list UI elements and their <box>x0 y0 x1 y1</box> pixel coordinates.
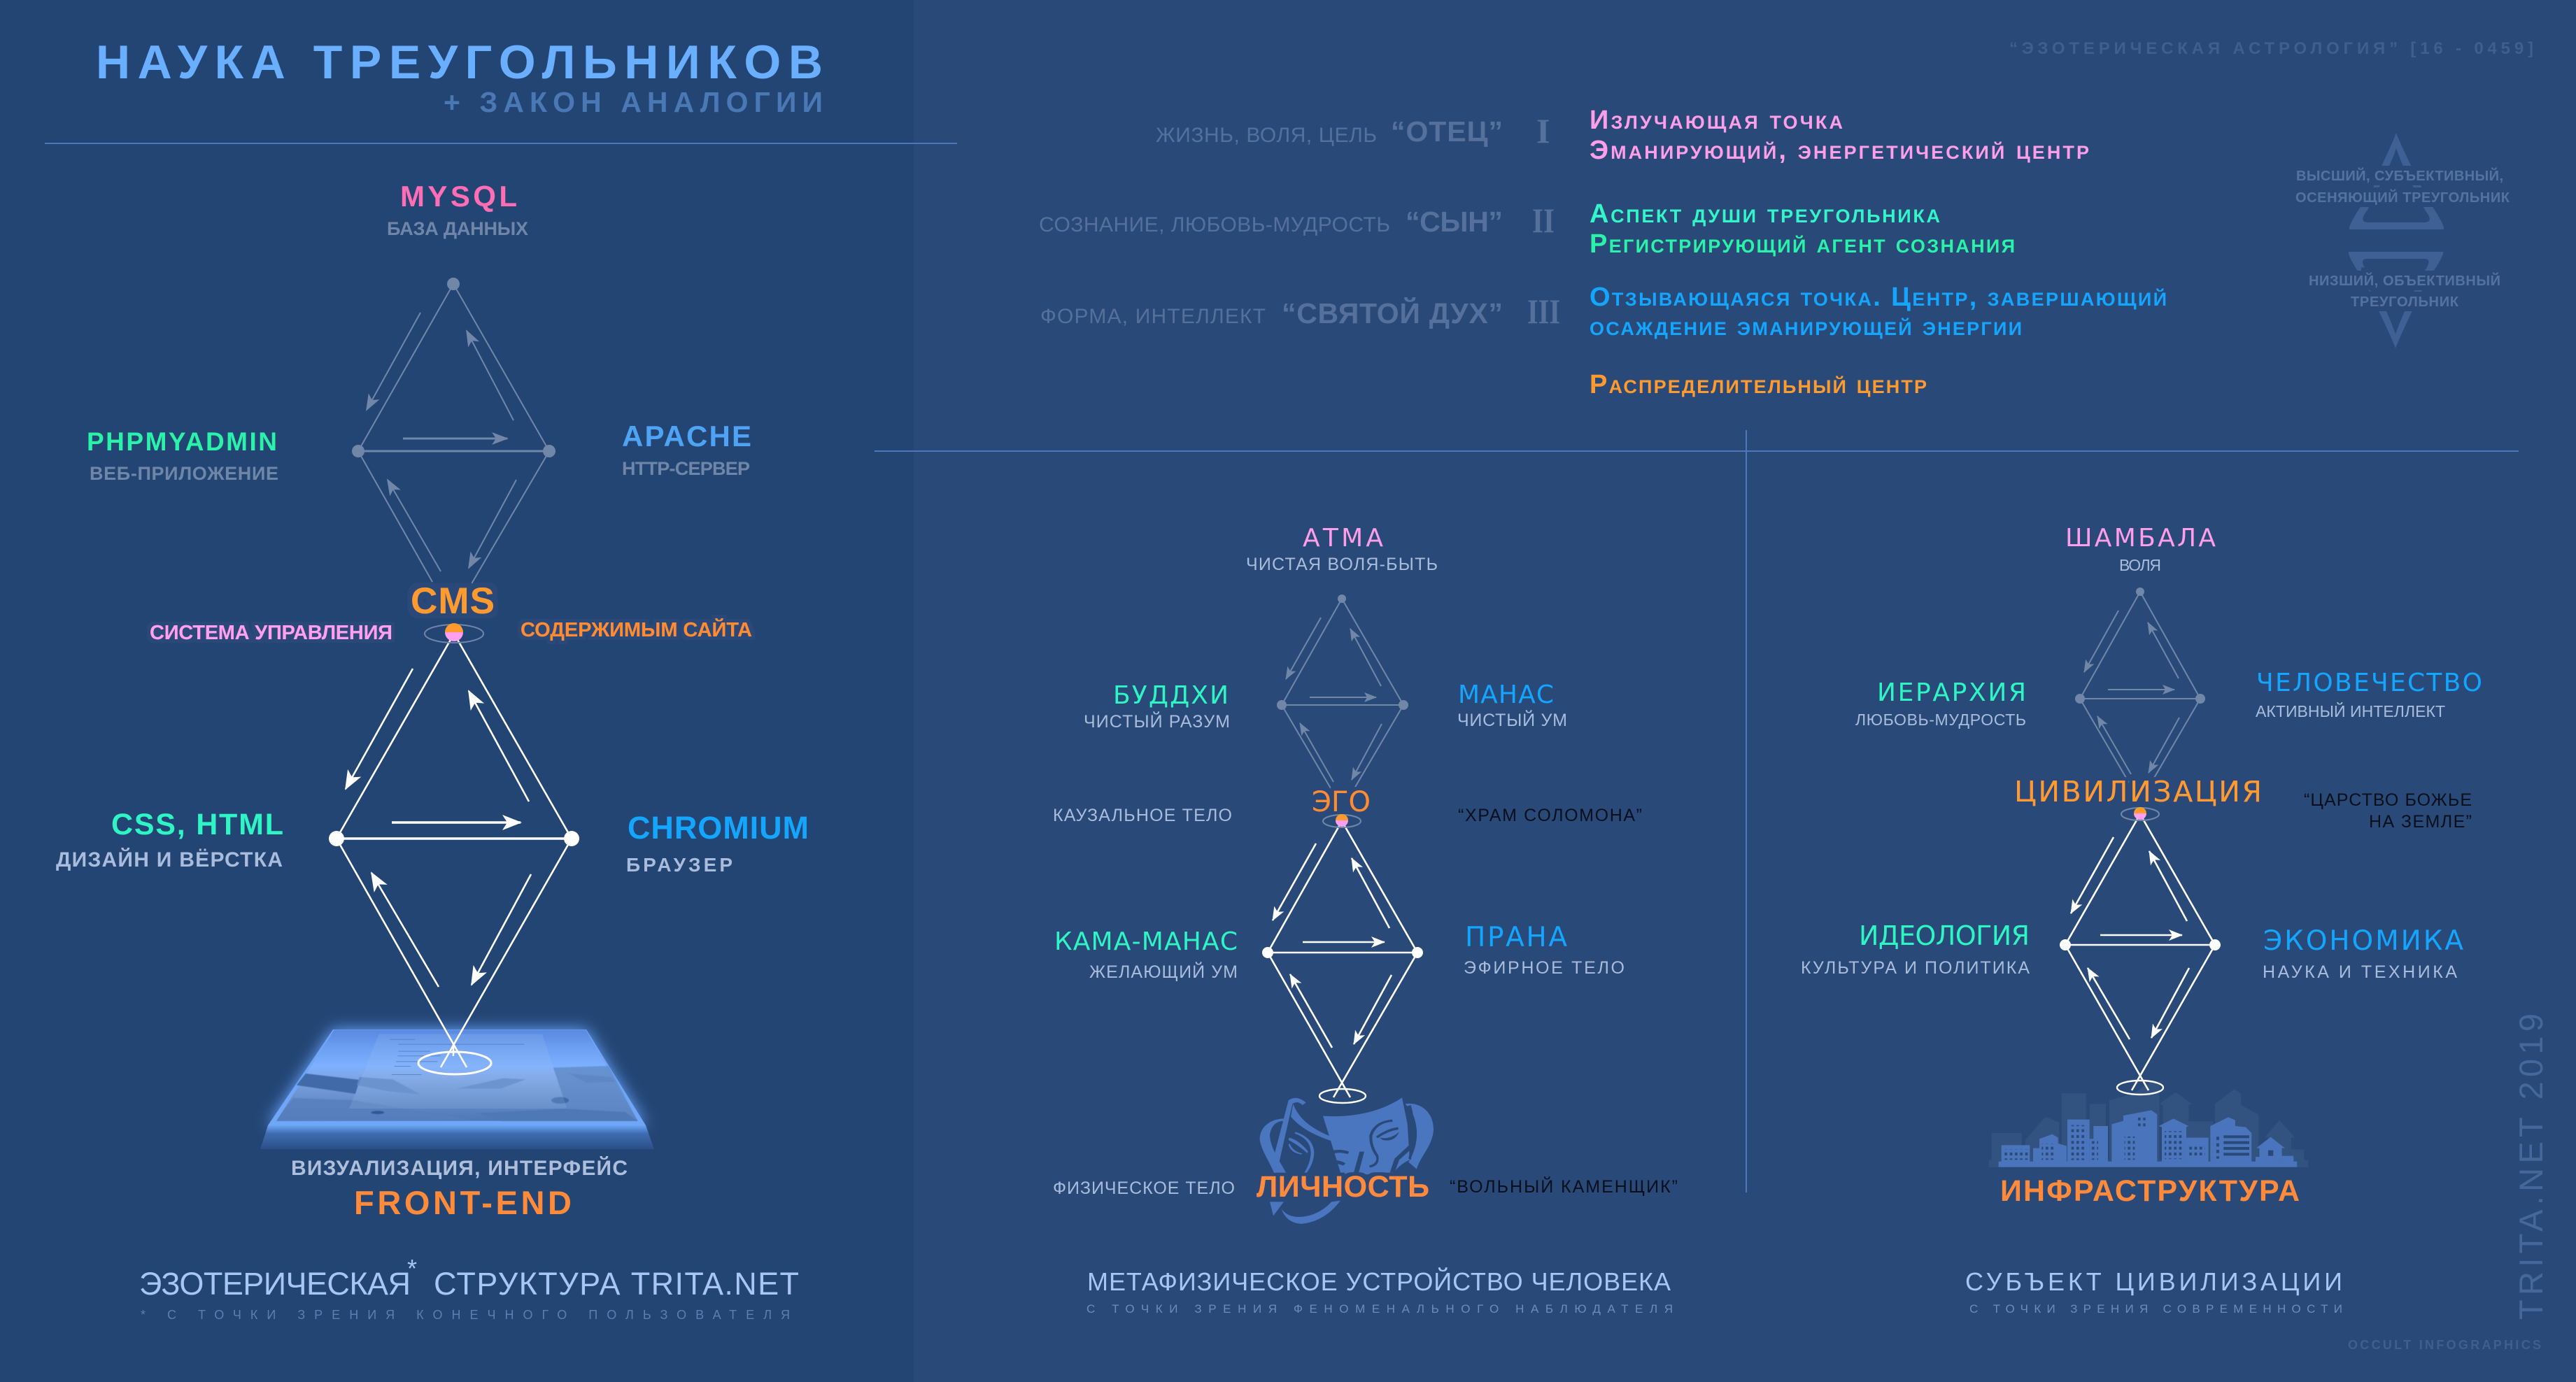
right labels: шамбала: ШАМБАЛА <box>2065 524 2216 553</box>
diagram: left lower white diamond <box>329 634 579 1074</box>
diagram: right lower white diamond <box>2060 814 2221 1095</box>
icon: glowing screen <box>260 1030 654 1149</box>
watermark: trita.net 2019: TRITA.NET 2019 <box>2512 1013 2549 1320</box>
city: foreground layer <box>1999 1110 2297 1167</box>
left labels: chromium: CHROMIUM <box>628 810 809 846</box>
heading: структура trita.net: СТРУКТУРА TRITA.NET <box>434 1266 799 1302</box>
right labels: человечество: ЧЕЛОВЕЧЕСТВО <box>2256 669 2482 697</box>
left labels: браузер: БРАУЗЕР <box>626 854 733 876</box>
legend: регистрирующий агент: Регистрирующий агент сознания <box>1590 229 2015 259</box>
left labels: система управления: СИСТЕМА УПРАВЛЕНИЯ <box>150 622 392 644</box>
title: НАУКА ТРЕУГОЛЬНИКОВ <box>96 36 823 89</box>
legend: форма left: ФОРМА, ИНТЕЛЛЕКТ <box>1040 305 1266 328</box>
legend: излучающая точка: Излучающая точка <box>1590 106 1843 135</box>
city: windows <box>2003 1117 2273 1160</box>
legend: numeral II: II <box>1532 201 1555 240</box>
diagram: right upper grey diamond <box>2075 587 2205 783</box>
right labels: любовь-мудрость: ЛЮБОВЬ-МУДРОСТЬ <box>1855 711 2026 729</box>
legend: отец left: ЖИЗНЬ, ВОЛЯ, ЦЕЛЬ <box>1156 124 1377 147</box>
note: осеняющий: ОСЕНЯЮЩИЙ ТРЕУГОЛЬНИК <box>2295 189 2510 206</box>
source reference: “ЭЗОТЕРИЧЕСКАЯ АСТРОЛОГИЯ” [16 - 0459] <box>2009 39 2533 58</box>
legend: numeral III: III <box>1527 292 1560 331</box>
screen: image in perspective <box>276 1030 637 1121</box>
subtitle: + ЗАКОН АНАЛОГИИ <box>444 86 823 118</box>
middle labels: желающий ум: ЖЕЛАЮЩИЙ УМ <box>1089 961 1238 982</box>
legend: сын left: СОЗНАНИЕ, ЛЮБОВЬ-МУДРОСТЬ <box>1039 213 1390 236</box>
diagram: middle upper grey diamond <box>1277 594 1408 788</box>
watermark: occult infographics: OCCULT INFOGRAPHICS <box>2348 1338 2541 1352</box>
icon: theatre masks <box>1260 1097 1434 1224</box>
right labels: цивилизация: ЦИВИЛИЗАЦИЯ <box>2014 775 2262 808</box>
note: низший: НИЗШИЙ, ОБЪЕКТИВНЫЙ <box>2309 272 2500 289</box>
right labels: на земле: НА ЗЕМЛЕ” <box>2369 812 2472 832</box>
middle labels: эфирное тело: ЭФИРНОЕ ТЕЛО <box>1464 958 1625 978</box>
middle labels: чистая воля-быть: ЧИСТАЯ ВОЛЯ-БЫТЬ <box>1246 555 1438 574</box>
heading: метафизическое устройство: МЕТАФИЗИЧЕСКОЕ УСТРОЙСТВО ЧЕЛОВЕКА <box>1087 1267 1671 1296</box>
heading: субъект цивилизации: СУБЪЕКТ ЦИВИЛИЗАЦИИ <box>1965 1267 2342 1296</box>
middle labels: чистый разум: ЧИСТЫЙ РАЗУМ <box>1084 711 1230 732</box>
icon: цивилизация node <box>2121 807 2159 820</box>
left labels: front-end: FRONT-END <box>354 1184 572 1221</box>
icon: cms node <box>425 623 483 643</box>
icon: city skyline <box>1989 1081 2308 1167</box>
icon: upper triangle <box>2349 133 2444 229</box>
legend: эманирующий центр: Эманирующий, энергетический центр <box>1590 136 2089 165</box>
left labels: http-сервер: НТТР-СЕРВЕР <box>622 458 750 479</box>
left labels: cms: CMS <box>411 580 495 622</box>
left labels: веб-приложение: ВЕБ-ПРИЛОЖЕНИЕ <box>90 463 278 484</box>
right labels: наука и техника: НАУКА И ТЕХНИКА <box>2263 962 2457 982</box>
legend: отец quote: “ОТЕЦ” <box>1391 115 1503 148</box>
middle labels: физическое тело: ФИЗИЧЕСКОЕ ТЕЛО <box>1053 1178 1235 1198</box>
left labels: phpmyadmin: PHPMYADMIN <box>87 427 277 456</box>
heading: эзотерическая: ЭЗОТЕРИЧЕСКАЯ <box>139 1266 411 1302</box>
middle labels: личность: ЛИЧНОСТЬ <box>1257 1170 1429 1204</box>
legend: святой дух: “СВЯТОЙ ДУХ” <box>1282 297 1503 329</box>
note: феноменальный наблюдатель: С ТОЧКИ ЗРЕНИЯ ФЕНОМЕНАЛЬНОГО НАБЛЮДАТЕЛЯ <box>1087 1302 1673 1316</box>
note: современность: С ТОЧКИ ЗРЕНИЯ СОВРЕМЕННОСТИ <box>1969 1302 2342 1316</box>
legend: numeral I: I <box>1536 111 1550 150</box>
middle labels: манас: МАНАС <box>1458 681 1554 709</box>
middle labels: храм соломона: “ХРАМ СОЛОМОНА” <box>1458 806 1642 825</box>
right labels: идеология: ИДЕОЛОГИЯ <box>1859 920 2030 951</box>
icon: lower triangle <box>2349 252 2443 348</box>
heading: asterisk: * <box>407 1254 417 1283</box>
right labels: культура и политика: КУЛЬТУРА И ПОЛИТИКА <box>1801 958 2030 978</box>
middle labels: буддхи: БУДДХИ <box>1113 681 1229 710</box>
left labels: база данных: БАЗА ДАННЫХ <box>387 218 528 239</box>
left labels: MYSQL: MYSQL <box>400 180 517 213</box>
middle labels: эго: ЭГО <box>1312 786 1371 818</box>
middle labels: атма: АТМА <box>1303 524 1383 553</box>
middle labels: чистый ум: ЧИСТЫЙ УМ <box>1457 709 1567 730</box>
right labels: инфраструктура: ИНФРАСТРУКТУРА <box>2000 1174 2300 1208</box>
diagram: left upper grey diamond <box>352 278 555 586</box>
right labels: царство божье: “ЦАРСТВО БОЖЬЕ <box>2304 790 2472 810</box>
legend: осаждение энергии: осаждение эманирующей энергии <box>1590 312 2022 341</box>
left labels: apache: APACHE <box>622 420 751 453</box>
middle labels: кама-манас: КАМА-МАНАС <box>1054 927 1238 956</box>
panel: left column background <box>0 0 914 1382</box>
note: высший: ВЫСШИЙ, СУБЪЕКТИВНЫЙ, <box>2296 167 2503 184</box>
right labels: иерархия: ИЕРАРХИЯ <box>1877 678 2026 707</box>
legend: аспект души: Аспект души треугольника <box>1590 199 1940 229</box>
right labels: активный интеллект: АКТИВНЫЙ ИНТЕЛЛЕКТ <box>2256 701 2445 720</box>
middle labels: прана: ПРАНА <box>1465 922 1567 953</box>
city: background layer <box>1989 1081 2308 1167</box>
icon: эго node <box>1323 814 1361 827</box>
legend: сын quote: “СЫН” <box>1406 206 1503 238</box>
left labels: визуализация, интерфейс: ВИЗУАЛИЗАЦИЯ, ИНТЕРФЕЙС <box>291 1156 628 1180</box>
middle labels: вольный каменщик: “ВОЛЬНЫЙ КАМЕНЩИК” <box>1450 1176 1678 1197</box>
legend: распределительный центр: Распределительный центр <box>1590 370 1927 399</box>
legend: отзывающаяся точка: Отзывающаяся точка. Центр, завершающий <box>1590 283 2167 312</box>
left labels: css html: CSS, HTML <box>111 808 283 841</box>
note: треугольник: ТРЕУГОЛЬНИК <box>2351 294 2459 310</box>
diagram: middle lower white diamond <box>1262 821 1423 1103</box>
middle labels: каузальное тело: КАУЗАЛЬНОЕ ТЕЛО <box>1053 806 1232 825</box>
right labels: воля: ВОЛЯ <box>2119 556 2161 574</box>
left labels: дизайн и вёрстка: ДИЗАЙН И ВЁРСТКА <box>56 848 283 871</box>
note: точка зрения: * С ТОЧКИ ЗРЕНИЯ КОНЕЧНОГО ПОЛЬЗОВАТЕЛЯ <box>141 1308 790 1322</box>
left labels: содержимым сайта: СОДЕРЖИМЫМ САЙТА <box>521 618 752 641</box>
right labels: экономика: ЭКОНОМИКА <box>2263 925 2463 957</box>
